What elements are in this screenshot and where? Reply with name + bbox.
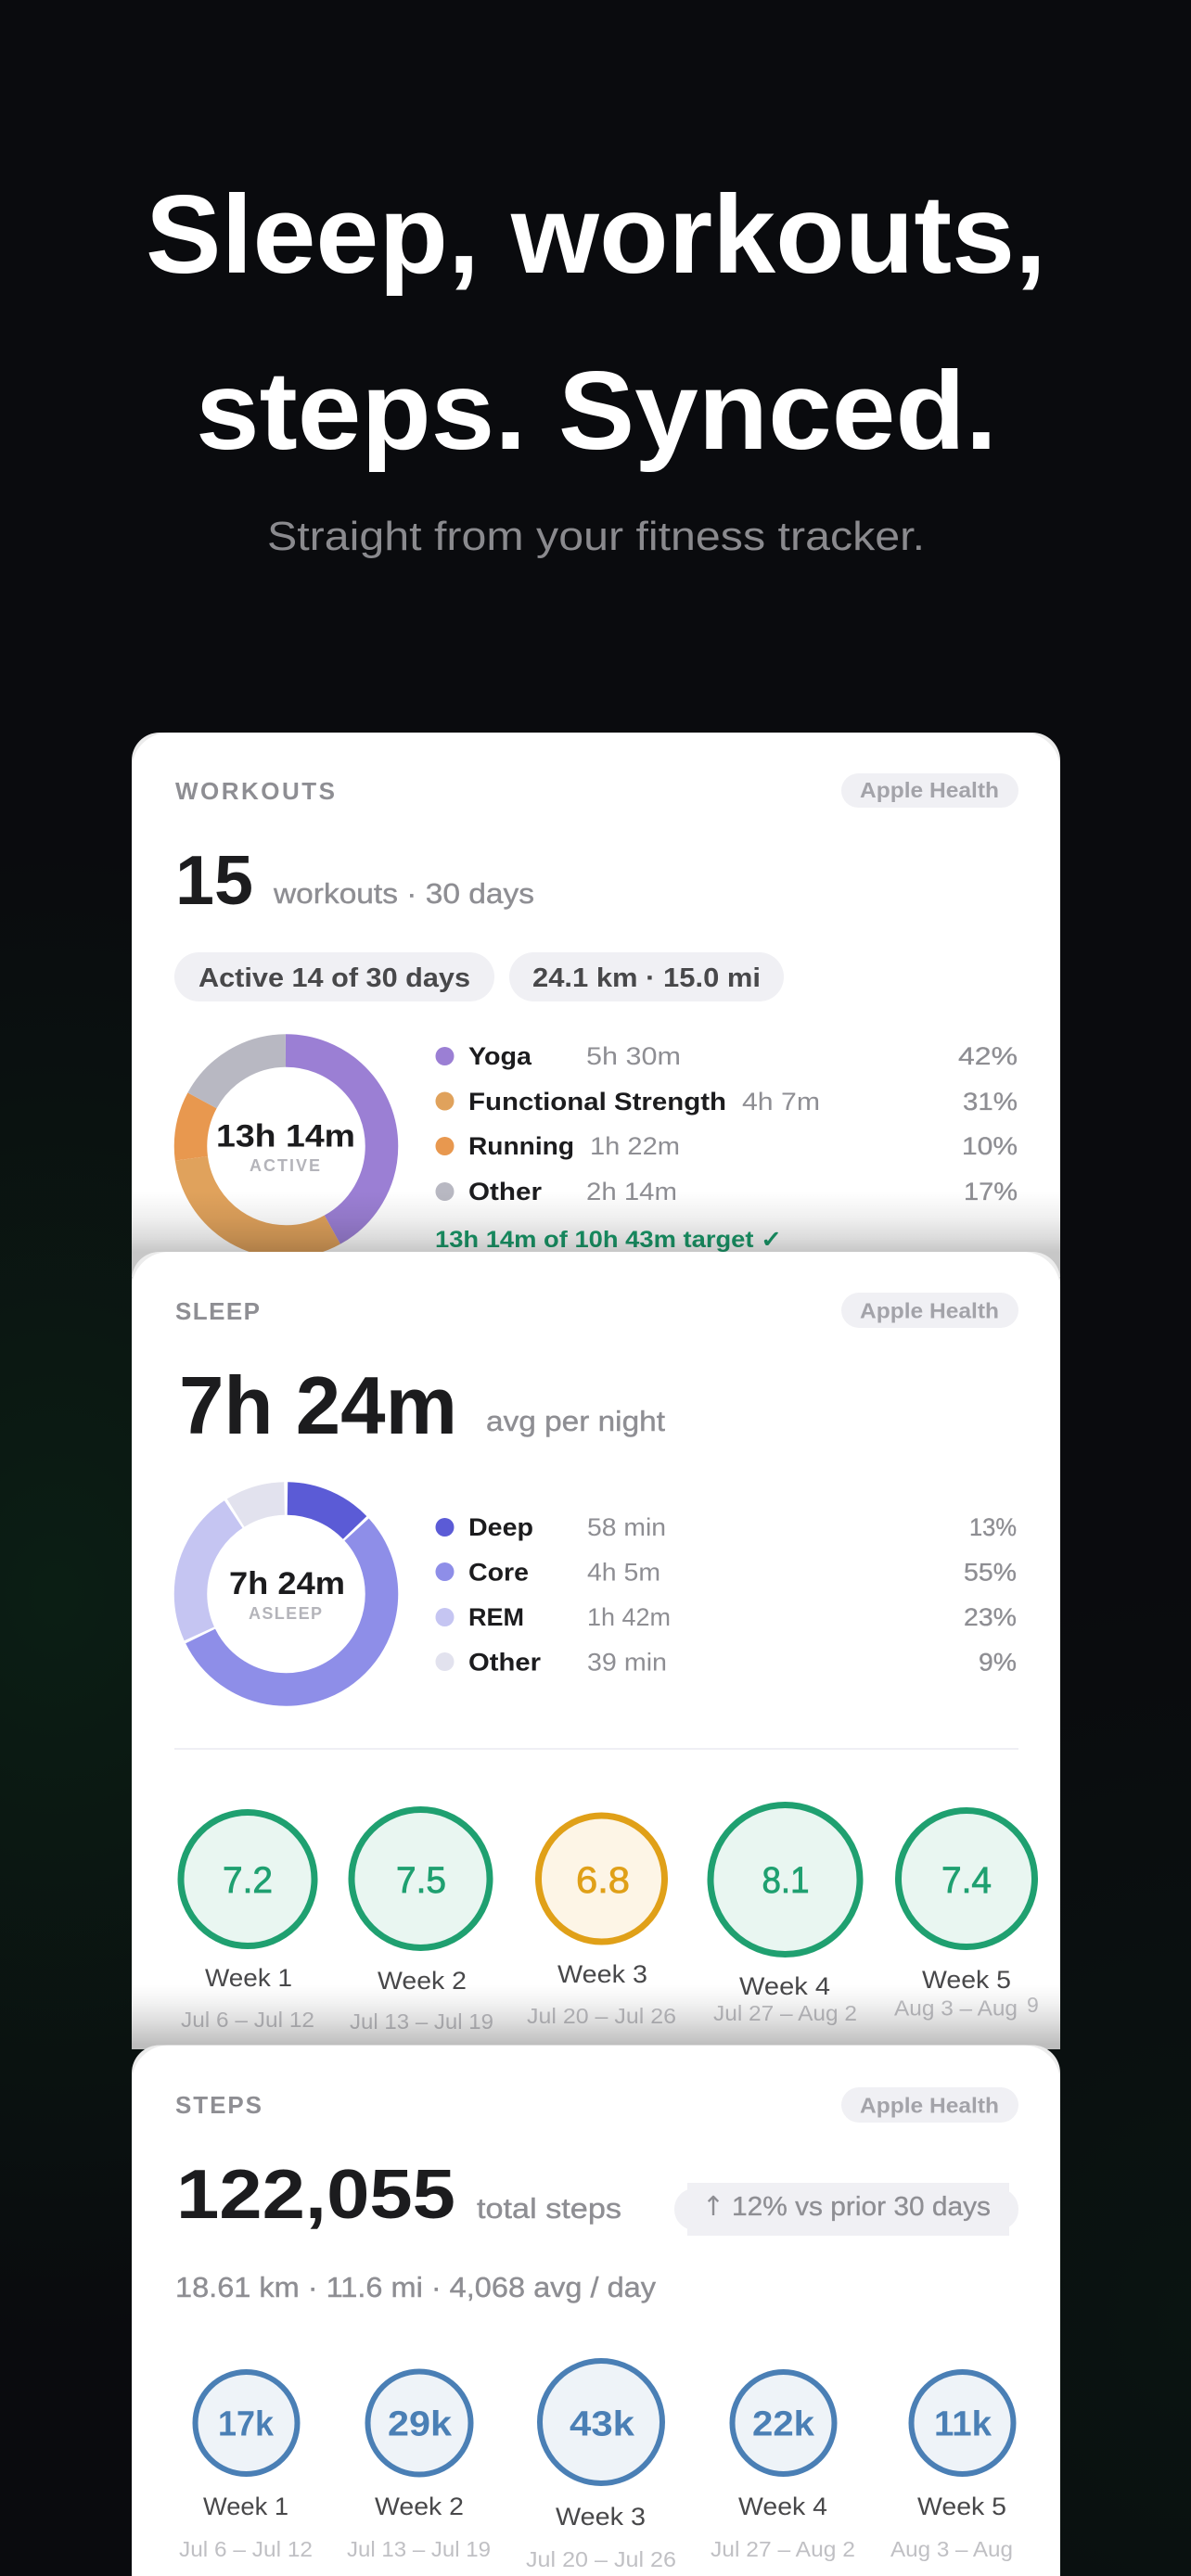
- trend badge: 12% vs prior 30 days: [732, 2192, 991, 2222]
- metric: workout count: [180, 856, 533, 910]
- steps week 1: Jul 6 – Jul 12: [179, 2537, 313, 2561]
- badge: apple health: Apple Health: [860, 1298, 999, 1322]
- badge: apple health: [841, 1293, 1018, 1328]
- steps week 3: Jul 20 – Jul 26: [526, 2547, 676, 2571]
- donut label: active total: 13h 14m: [216, 1118, 355, 1154]
- legend row: other: 17%: [964, 1178, 1018, 1205]
- donut label: active total: ACTIVE: [250, 1156, 320, 1175]
- legend row: other: Other: [468, 1649, 542, 1677]
- sleep week 5: Week 5: [922, 1966, 1011, 1994]
- pill: active days: Active 14 of 30 days: [198, 963, 470, 993]
- sleep week 4: Jul 27 – Aug 2: [713, 2001, 857, 2025]
- steps week 4: 22k: [752, 2405, 815, 2444]
- donut chart: sleep: [191, 1498, 382, 1690]
- legend row: rem: 1h 42m: [587, 1603, 671, 1631]
- badge: apple health: [841, 773, 1018, 808]
- sleep week 3: Jul 20 – Jul 26: [527, 2004, 676, 2028]
- legend row: running: Running: [468, 1132, 574, 1160]
- sleep week 5: 9: [1027, 1993, 1039, 2017]
- sleep week 2: [350, 1810, 493, 2034]
- pill: active days: [174, 952, 494, 1001]
- legend row: functional strength: [436, 1092, 1017, 1115]
- steps week 2: Week 2: [375, 2493, 464, 2520]
- legend row: deep: [436, 1517, 1017, 1541]
- legend row: deep: 58 min: [587, 1513, 666, 1541]
- legend row: deep: Deep: [468, 1513, 533, 1541]
- donut label: asleep total: ASLEEP: [249, 1604, 322, 1623]
- heading: workouts: WORKOUTS: [175, 777, 335, 805]
- sleep week 2: 7.5: [396, 1860, 446, 1901]
- sleep week 1: Jul 6 – Jul 12: [181, 2008, 314, 2032]
- steps week 5: [890, 2372, 1013, 2561]
- donut label: asleep total: [230, 1571, 343, 1619]
- legend row: other: 9%: [979, 1649, 1017, 1677]
- panel: sleep: [132, 1252, 1060, 2086]
- legend row: yoga: 5h 30m: [586, 1042, 681, 1070]
- sleep week 4: 8.1: [762, 1860, 809, 1901]
- steps week 4: Jul 27 – Aug 2: [711, 2537, 855, 2561]
- metric: average sleep: 7h 24m: [179, 1359, 457, 1451]
- legend row: other: 2h 14m: [586, 1178, 677, 1205]
- target note: 13h 14m of 10h 43m target ✓: [435, 1227, 782, 1253]
- legend row: running: 1h 22m: [590, 1132, 680, 1160]
- panel: steps: [132, 2046, 1060, 2576]
- sleep week 1: Week 1: [205, 1964, 292, 1992]
- steps week 3: [526, 2361, 676, 2571]
- subtitle: Straight from your fitness tracker.: [267, 514, 925, 559]
- legend row: functional strength: Functional Strength: [468, 1088, 726, 1116]
- trend badge: [674, 2183, 1018, 2236]
- legend row: yoga: 42%: [958, 1042, 1018, 1070]
- steps week 2: [347, 2372, 491, 2561]
- donut label: active total: [218, 1124, 353, 1171]
- metric: average sleep: [182, 1374, 665, 1437]
- steps week 1: Week 1: [203, 2493, 288, 2520]
- card: workouts background: [132, 733, 1060, 1326]
- trend badge: ↑: [702, 2190, 724, 2222]
- legend row: core: Core: [468, 1558, 529, 1586]
- pill: distance: [509, 952, 784, 1001]
- sleep week 3: Week 3: [557, 1960, 647, 1988]
- legend row: core: 4h 5m: [587, 1558, 660, 1586]
- pill: distance: 24.1 km · 15.0 mi: [532, 963, 761, 993]
- legend row: rem: REM: [468, 1603, 524, 1631]
- legend row: functional strength: 4h 7m: [742, 1088, 820, 1116]
- legend row: core: [436, 1562, 1017, 1581]
- metric: workout count: workouts · 30 days: [273, 877, 534, 910]
- title: Sleep, workouts,: [146, 172, 1046, 297]
- panel: workouts: [132, 733, 1060, 1326]
- steps week 2: 29k: [388, 2405, 453, 2444]
- metric: workout count: 15: [175, 841, 253, 919]
- sleep week 2: Week 2: [378, 1967, 467, 1995]
- legend row: running: [436, 1137, 1017, 1159]
- sleep week 5: [894, 1810, 1039, 2020]
- steps week 2: Jul 13 – Jul 19: [347, 2537, 491, 2561]
- sleep week 5: 7.4: [941, 1860, 992, 1901]
- card: steps background: [132, 2046, 1060, 2576]
- title: [146, 172, 1046, 473]
- steps week 5: Aug 3 – Aug: [890, 2537, 1013, 2561]
- donut chart: workouts: [191, 1051, 382, 1242]
- sleep week 4: Week 4: [739, 1972, 830, 2000]
- legend row: yoga: Yoga: [468, 1042, 532, 1070]
- card: sleep background: [132, 1252, 1060, 2086]
- badge: apple health: [841, 2087, 1018, 2123]
- steps week 4: [711, 2372, 855, 2561]
- heading: sleep: SLEEP: [175, 1297, 260, 1325]
- metric: average sleep: avg per night: [486, 1405, 665, 1437]
- steps week 5: Week 5: [917, 2493, 1006, 2520]
- metric: total steps: [181, 2169, 621, 2229]
- legend row: other: 39 min: [587, 1649, 667, 1677]
- legend row: functional strength: 31%: [963, 1088, 1018, 1116]
- sleep week 3: 6.8: [576, 1860, 630, 1901]
- sleep week 2: Jul 13 – Jul 19: [350, 2009, 493, 2034]
- legend row: deep: 13%: [969, 1513, 1017, 1541]
- legend row: other: [436, 1652, 1017, 1671]
- sleep week 4: [711, 1804, 860, 2025]
- legend row: rem: 23%: [964, 1603, 1017, 1631]
- stats line: 18.61 km · 11.6 mi · 4,068 avg / day: [175, 2271, 657, 2303]
- heading: steps: STEPS: [175, 2091, 262, 2119]
- steps week 1: 17k: [218, 2405, 275, 2444]
- legend row: yoga: [436, 1046, 1017, 1070]
- sleep week 3: [527, 1816, 676, 2028]
- badge: apple health: Apple Health: [860, 2094, 999, 2118]
- legend row: running: 10%: [962, 1132, 1018, 1160]
- metric: total steps: 122,055: [176, 2155, 455, 2233]
- steps week 4: Week 4: [738, 2493, 827, 2520]
- steps week 5: 11k: [934, 2405, 992, 2444]
- sleep week 1: [181, 1812, 314, 2032]
- donut label: asleep total: 7h 24m: [229, 1566, 345, 1601]
- sleep week 5: Aug 3 – Aug: [894, 1996, 1018, 2020]
- title: steps. Synced.: [196, 349, 997, 473]
- badge: apple health: Apple Health: [860, 778, 999, 802]
- steps week 3: 43k: [570, 2405, 635, 2444]
- sleep week 1: 7.2: [223, 1860, 273, 1901]
- steps week 1: [179, 2372, 313, 2561]
- legend row: core: 55%: [964, 1558, 1017, 1586]
- steps week 3: Week 3: [556, 2503, 646, 2531]
- metric: total steps: total steps: [477, 2192, 621, 2225]
- legend row: rem: [436, 1608, 1017, 1626]
- legend row: other: [436, 1181, 1017, 1201]
- legend row: other: Other: [468, 1178, 543, 1205]
